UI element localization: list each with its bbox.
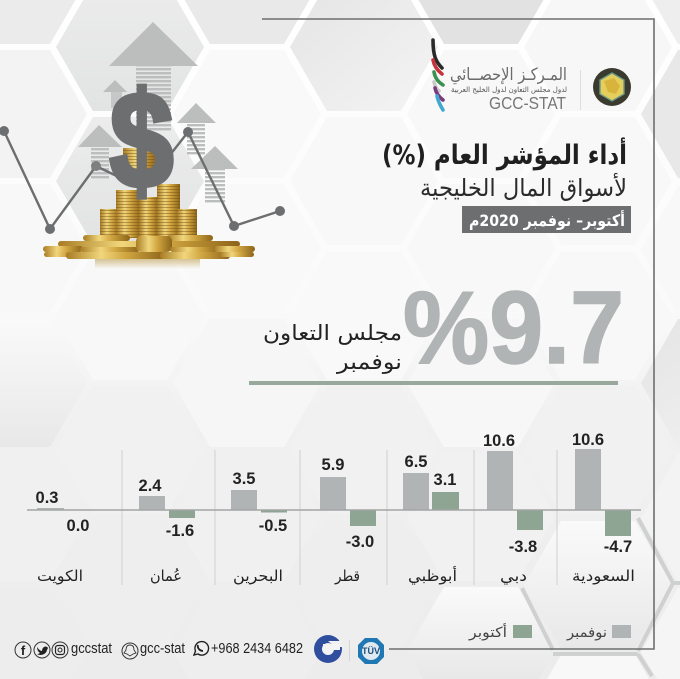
legend: نوفمبر xyxy=(566,625,607,641)
bars: Kuwait: 0.3 xyxy=(36,489,58,507)
headline figure: %9.7 xyxy=(403,270,624,385)
icon: GCC emblem xyxy=(593,68,631,106)
bars: Abu Dhabi xyxy=(403,453,459,586)
bars: Abu Dhabi: 3.1 xyxy=(434,471,456,489)
icon: dollar sign: $ xyxy=(110,64,173,216)
logo: GCC-STAT xyxy=(433,40,631,113)
bars: Saudi Arabia: السعودية xyxy=(572,567,635,585)
icon: gold coins xyxy=(43,148,255,269)
logo: GCC-STAT: المـركـز الإحصــائي xyxy=(450,65,567,85)
footer contacts xyxy=(15,641,303,659)
bars: Oman: 2.4 xyxy=(139,477,162,495)
bars: Bahrain: البحرين xyxy=(233,567,283,585)
bars: Qatar xyxy=(320,456,376,585)
bars: Dubai: دبي xyxy=(500,567,527,586)
logo: GCC-STAT: لدول مجلس التعاون لدول الخليج العربية xyxy=(451,85,567,94)
bars: Oman: عُمان xyxy=(150,567,182,585)
icon: whatsapp xyxy=(194,642,209,655)
bars: Saudi Arabia: -4.7 xyxy=(604,538,632,556)
bars: Saudi Arabia xyxy=(572,431,635,585)
bars: Dubai: -3.8 xyxy=(509,538,537,556)
bars: Bahrain: 3.5 xyxy=(233,470,255,488)
bars: Kuwait: الكويت xyxy=(37,567,83,585)
headline label: نوفمبر xyxy=(336,350,402,374)
bars: Qatar: 5.9 xyxy=(322,456,344,474)
bars: Bahrain: -0.5 xyxy=(259,517,287,535)
bars: Bahrain xyxy=(231,470,287,585)
icon: twitter xyxy=(34,642,50,658)
bars: Kuwait xyxy=(36,489,89,585)
date badge: أكتوبر– نوفمبر 2020م xyxy=(469,210,625,230)
icon: snapchat xyxy=(122,643,138,659)
bars: Dubai xyxy=(483,432,543,586)
bar chart xyxy=(27,431,641,586)
footer contacts: gcc-stat xyxy=(140,641,185,657)
date badge xyxy=(462,206,631,233)
bars: Oman xyxy=(139,477,195,585)
line chart decoration xyxy=(0,126,285,234)
footer contacts: +968 2434 6482 xyxy=(211,641,303,657)
bars: Saudi Arabia: 10.6 xyxy=(572,431,604,449)
bars: Qatar: -3.0 xyxy=(346,533,374,551)
bars: Dubai: 10.6 xyxy=(483,432,515,450)
headline label xyxy=(263,321,402,374)
illustration: arrows, dollar sign, coins and line xyxy=(0,22,285,269)
title: أداء المؤشر العام (%) xyxy=(382,137,627,171)
bars: Abu Dhabi: 6.5 xyxy=(405,453,427,471)
bars: Abu Dhabi: أبوظبي xyxy=(408,566,457,586)
icon: ribbon xyxy=(433,40,443,110)
icon: up arrows xyxy=(78,22,238,204)
icon: facebook: f xyxy=(21,643,26,658)
legend xyxy=(468,623,631,641)
logo: certification G xyxy=(314,635,342,663)
subtitle: لأسواق المال الخليجية xyxy=(420,173,627,202)
bars: Qatar: قطر xyxy=(334,567,360,585)
logo: GCC-STAT: GCC-STAT xyxy=(489,93,566,113)
logo: TUV xyxy=(358,638,384,664)
bars: Oman: -1.6 xyxy=(166,522,194,540)
icon: facebook xyxy=(15,642,31,658)
headline label: مجلس التعاون xyxy=(263,321,402,345)
bars: Kuwait: 0.0 xyxy=(67,517,89,535)
green rule xyxy=(249,381,618,385)
footer contacts: gccstat xyxy=(71,641,112,657)
logo: TUV: TÜV xyxy=(362,646,380,656)
frame lines xyxy=(262,19,654,649)
icon: instagram xyxy=(52,642,68,658)
legend: أكتوبر xyxy=(468,623,507,641)
